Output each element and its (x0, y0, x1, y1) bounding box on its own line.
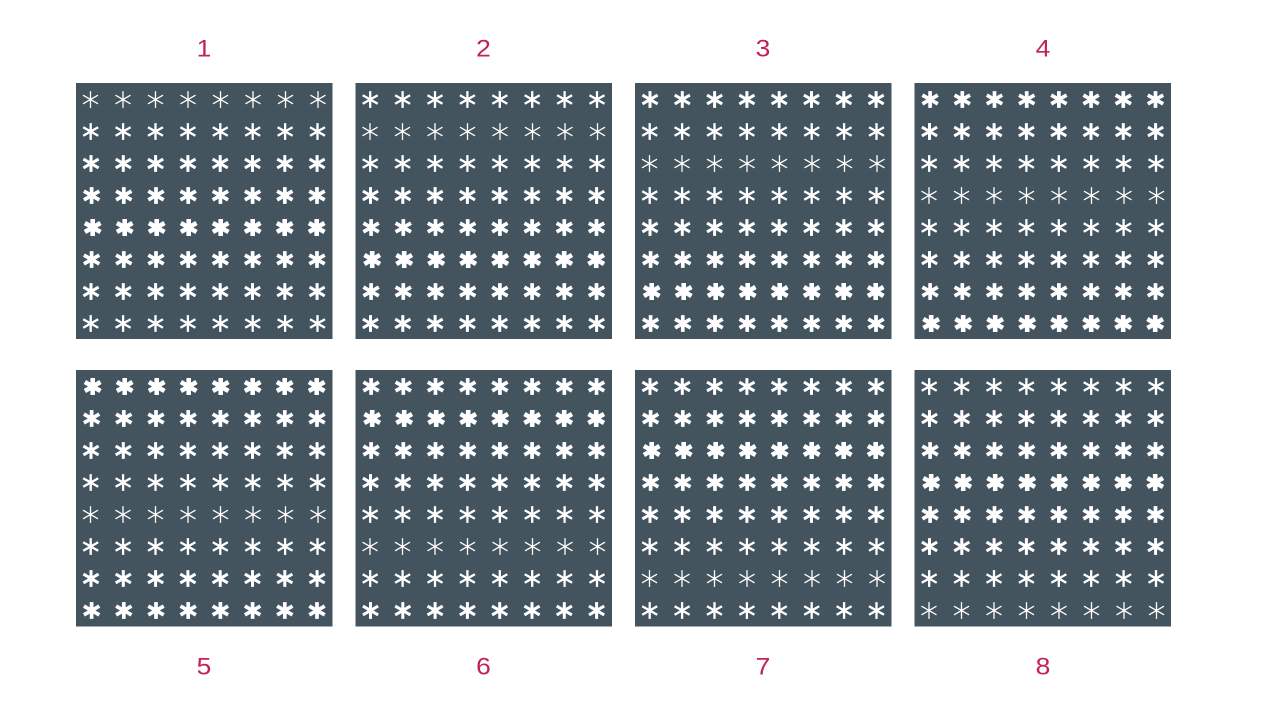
panel 6: thin row 6 (356, 370, 612, 626)
panel 7: thin row 7 (635, 370, 892, 626)
panel 4: thin row 4 (914, 83, 1171, 339)
label: 8: 8 (1036, 654, 1050, 680)
label: 2: 2 (476, 36, 491, 62)
label: 7: 7 (756, 654, 770, 680)
label: 3: 3 (756, 36, 770, 62)
label: 4: 4 (1036, 36, 1050, 62)
label: 1: 1 (197, 36, 211, 62)
panel 5: thin row 5 (76, 370, 332, 626)
panel 8: thin row 8 (914, 370, 1171, 626)
panel 2: thin row 2 (356, 83, 612, 339)
panel 3: thin row 3 (635, 83, 892, 339)
label: 5: 5 (197, 654, 211, 680)
label: 6: 6 (476, 654, 491, 680)
panel 1: thin row 1 (76, 83, 332, 339)
